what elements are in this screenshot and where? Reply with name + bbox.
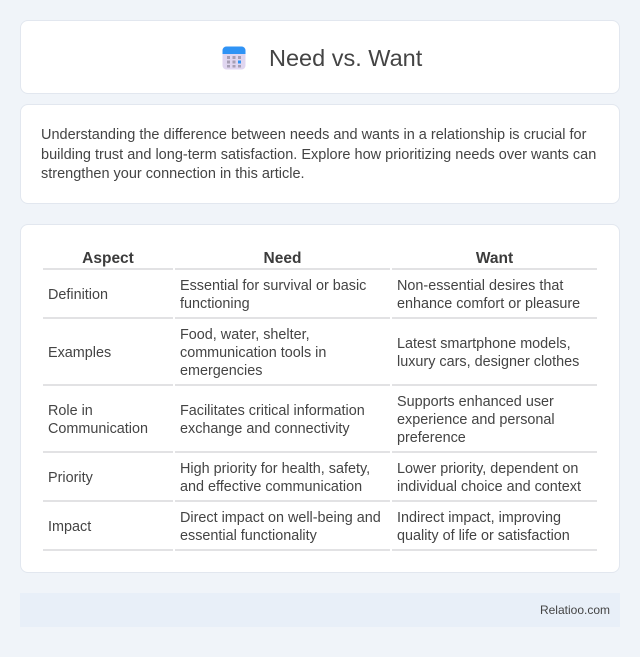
footer bar [20, 593, 620, 627]
row label: Examples: Examples [48, 345, 111, 361]
row label: Role in Communication: Role in [48, 403, 93, 419]
want: Definition [397, 278, 580, 312]
want: Role in Communication: experience and personal [397, 412, 555, 428]
need: Role in Communication [180, 403, 365, 437]
want: Impact: Indirect impact, improving [397, 510, 561, 526]
intro text: building trust and long-term satisfaction. Explore how prioritizing needs over wants can [41, 146, 596, 162]
need: Examples: emergencies [180, 363, 262, 379]
need: Impact: essential functionality [180, 528, 317, 544]
panel: introduction [20, 104, 620, 204]
want: Role in Communication: Supports enhanced user [397, 394, 554, 410]
need: Priority: and effective communication [180, 479, 362, 495]
need: Impact [180, 510, 381, 544]
intro text: Understanding the difference between needs and wants in a relationship is crucial for [41, 127, 586, 143]
want: Examples: Latest smartphone models, [397, 336, 571, 352]
row label: Priority: Priority [48, 470, 93, 486]
need: Examples: Food, water, shelter, [180, 327, 310, 343]
need: Priority: High priority for health, safety, [180, 461, 370, 477]
want: Examples [397, 336, 579, 370]
table header: Want: Want [476, 250, 513, 267]
intro text: strengthen your connection in this article. [41, 166, 305, 182]
need: Impact: Direct impact on well-being and [180, 510, 381, 526]
row label: Impact: Impact [48, 519, 91, 535]
want: Impact [397, 510, 570, 544]
row label: Role in Communication: Communication [48, 421, 148, 437]
panel: title card [20, 20, 620, 94]
want: Definition: enhance comfort or pleasure [397, 296, 580, 312]
footer credit: Relatioo.com [540, 603, 610, 617]
need: Priority [180, 461, 370, 495]
icon: calendar [222, 46, 246, 70]
panel: comparison table [20, 224, 620, 573]
table header: Need: Need [264, 250, 301, 267]
want: Role in Communication: preference [397, 430, 466, 446]
table header: Aspect: Aspect [82, 250, 134, 267]
want: Definition: Non-essential desires that [397, 278, 563, 294]
want: Priority: individual choice and context [397, 479, 581, 495]
want: Impact: quality of life or satisfaction [397, 528, 570, 544]
want: Priority [397, 461, 581, 495]
need: Definition: Essential for survival or basic [180, 278, 366, 294]
want: Role in Communication [397, 394, 555, 446]
intro text [41, 127, 596, 182]
need: Definition: functioning [180, 296, 250, 312]
title: Need vs. Want [269, 45, 422, 71]
need: Role in Communication: exchange and connectivity [180, 421, 350, 437]
need: Definition [180, 278, 366, 312]
row label: Role in Communication [48, 403, 148, 437]
need: Examples [180, 327, 326, 379]
want: Examples: luxury cars, designer clothes [397, 354, 579, 370]
row label: Definition: Definition [48, 287, 108, 303]
need: Examples: communication tools in [180, 345, 326, 361]
want: Priority: Lower priority, dependent on [397, 461, 578, 477]
need: Role in Communication: Facilitates critical information [180, 403, 365, 419]
